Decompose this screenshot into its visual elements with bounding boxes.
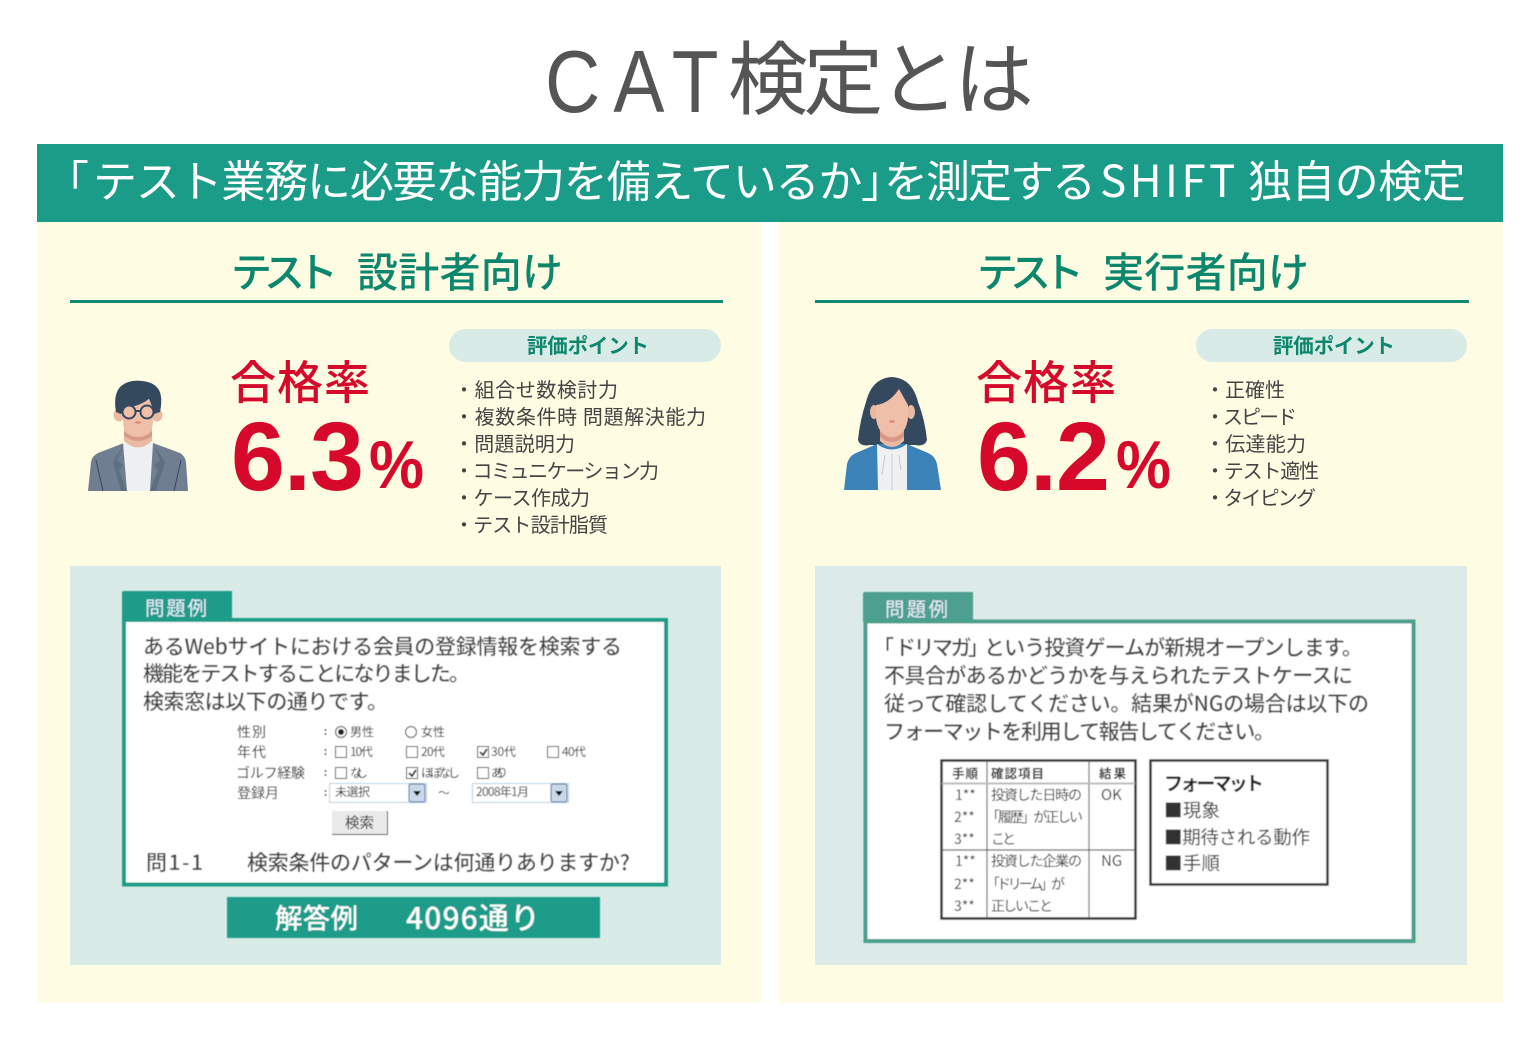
search form: 2008年1月 bbox=[476, 783, 529, 800]
test case table: 正しいこと bbox=[991, 896, 1053, 916]
title bbox=[545, 33, 1034, 131]
example question: left: 検索条件のパターンは何通りありますか? bbox=[247, 847, 630, 877]
test case table: 投資した企業の bbox=[991, 851, 1082, 871]
subtitle band: 」 bbox=[861, 146, 905, 210]
test case table: 「履歴」が正しい bbox=[986, 807, 1083, 827]
evaluation list: left: ・テスト設計脂質 bbox=[454, 509, 608, 538]
panel heading: right bbox=[815, 239, 1469, 303]
test case table: 結果 bbox=[1099, 763, 1126, 782]
test case table: 手順 bbox=[952, 763, 978, 782]
example question: right: フォーマットを利用して報告してください。 bbox=[884, 716, 1275, 746]
example background: right bbox=[815, 566, 1467, 965]
example question: right: 問題例 bbox=[885, 593, 948, 622]
panel heading: left: 設計者向け bbox=[357, 239, 563, 299]
evaluation list: right: ・正確性 bbox=[1205, 374, 1285, 403]
evaluation list: right: ・伝達能力 bbox=[1205, 428, 1306, 457]
search form: ほぼなし bbox=[421, 764, 460, 781]
test case table: 2** bbox=[954, 807, 975, 827]
search form: ゴルフ経験 bbox=[236, 763, 305, 783]
pass rate: left: 6.3 bbox=[231, 402, 364, 511]
evaluation list: right: ・スピード bbox=[1205, 401, 1297, 430]
icon: woman bbox=[844, 377, 941, 490]
format box: ■現象 bbox=[1164, 797, 1220, 823]
example background: left bbox=[70, 566, 721, 965]
example question: left: 機能をテストすることになりました。 bbox=[143, 658, 470, 688]
pass rate: right: 合格率 bbox=[976, 347, 1116, 413]
answer bar: 4096通り bbox=[406, 894, 540, 938]
title: 検定とは bbox=[728, 36, 1034, 125]
evaluation list: right: ・テスト適性 bbox=[1205, 455, 1319, 484]
panel heading: right: 実行者向け bbox=[1103, 239, 1309, 299]
search form: 未選択 bbox=[335, 783, 370, 800]
test case table: OK bbox=[1101, 784, 1122, 805]
test case table: NG bbox=[1101, 850, 1122, 871]
test case table: 「ドリーム」が bbox=[986, 874, 1065, 894]
subtitle band: テスト業務に必要な能力を備えているか bbox=[93, 146, 861, 210]
example question: left: 検索窓は以下の通りです。 bbox=[143, 686, 388, 716]
answer bar bbox=[227, 894, 600, 938]
evaluation list: right: ・タイピング bbox=[1205, 482, 1316, 511]
pass rate: right bbox=[976, 347, 1171, 511]
test case table: 確認項目 bbox=[991, 763, 1044, 782]
evaluation list: left: ・複数条件時 問題解決能力 bbox=[454, 401, 706, 430]
evaluation list: left: ・ケース作成力 bbox=[454, 482, 590, 511]
pass rate: left bbox=[230, 347, 424, 511]
search form: 年代 bbox=[237, 742, 266, 762]
search form: 男性 bbox=[350, 723, 374, 740]
evaluation points pill: right: 評価ポイント bbox=[1273, 329, 1395, 359]
test case table: 投資した日時の bbox=[991, 785, 1082, 805]
evaluation list: left: ・組合せ数検討力 bbox=[454, 374, 618, 403]
example question: right: ドリマガ bbox=[895, 632, 971, 662]
evaluation points pill: left: 評価ポイント bbox=[527, 329, 649, 359]
example question: left: 問1-1 bbox=[146, 847, 203, 877]
answer bar: 解答例 bbox=[275, 896, 358, 936]
search form bbox=[236, 722, 586, 834]
example question: right: という投資ゲームが新規オープンします。 bbox=[984, 632, 1362, 662]
search form: 10代 bbox=[350, 743, 373, 760]
subtitle band bbox=[37, 144, 1503, 222]
example question: right: 不具合があるかどうかを与えられたテストケースに bbox=[884, 660, 1353, 690]
search form: あり bbox=[491, 764, 508, 781]
pass rate: left: 合格率 bbox=[230, 347, 370, 413]
evaluation points pill: right bbox=[1196, 329, 1467, 362]
evaluation list: left bbox=[454, 374, 706, 538]
pass rate: right: 6.2 bbox=[977, 402, 1110, 511]
example question: left: 問題例 bbox=[145, 592, 207, 621]
test case table bbox=[942, 760, 1136, 918]
search form: 20代 bbox=[421, 743, 445, 760]
example question: right: 」 bbox=[968, 632, 989, 662]
evaluation list: right bbox=[1205, 374, 1319, 511]
test case table: こと bbox=[991, 829, 1016, 849]
search form: 〜 bbox=[438, 784, 450, 801]
subtitle band: 独自の検定 bbox=[1248, 146, 1465, 210]
pass rate: left: % bbox=[369, 427, 424, 503]
format box: フォーマット bbox=[1164, 769, 1264, 796]
example question: right: 従って確認してください。結果がNGの場合は以下の bbox=[884, 688, 1369, 718]
test case table: 1** bbox=[955, 785, 976, 805]
search form: 40代 bbox=[562, 743, 586, 760]
test case table: 2** bbox=[954, 874, 975, 894]
search form: 性別 bbox=[237, 722, 266, 742]
evaluation points pill: left bbox=[449, 329, 721, 362]
search form: 女性 bbox=[421, 723, 445, 740]
test case table: 1** bbox=[955, 851, 976, 871]
example question: left: あるWebサイトにおける会員の登録情報を検索する bbox=[143, 631, 622, 661]
format box: ■手順 bbox=[1164, 850, 1220, 876]
panel: right executors bbox=[779, 222, 1503, 1003]
format box bbox=[1150, 760, 1328, 884]
search form: なし bbox=[350, 764, 368, 781]
evaluation list: left: ・コミュニケーション力 bbox=[454, 455, 659, 484]
panel heading: left bbox=[70, 239, 723, 303]
subtitle band: SHIFT bbox=[1100, 146, 1239, 210]
pass rate: right: % bbox=[1116, 427, 1171, 503]
panel heading: right: テスト bbox=[977, 239, 1084, 299]
example question: right: 「 bbox=[873, 632, 894, 662]
subtitle band: を測定する bbox=[884, 146, 1094, 210]
test case table: 3** bbox=[954, 829, 975, 849]
search form: 検索 bbox=[345, 812, 374, 833]
evaluation list: left: ・問題説明力 bbox=[454, 428, 575, 457]
subtitle band: 「 bbox=[45, 146, 89, 210]
title: CAT bbox=[545, 33, 732, 131]
search form: 30代 bbox=[491, 743, 516, 760]
example question: left bbox=[122, 591, 666, 938]
example question: right bbox=[863, 592, 1414, 941]
icon: man with glasses bbox=[88, 381, 188, 491]
search form: 登録月 bbox=[237, 783, 279, 803]
format box: ■期待される動作 bbox=[1164, 824, 1310, 850]
panel: left designers bbox=[37, 222, 761, 1003]
panel heading: left: テスト bbox=[231, 239, 338, 299]
test case table: 3** bbox=[954, 896, 975, 916]
